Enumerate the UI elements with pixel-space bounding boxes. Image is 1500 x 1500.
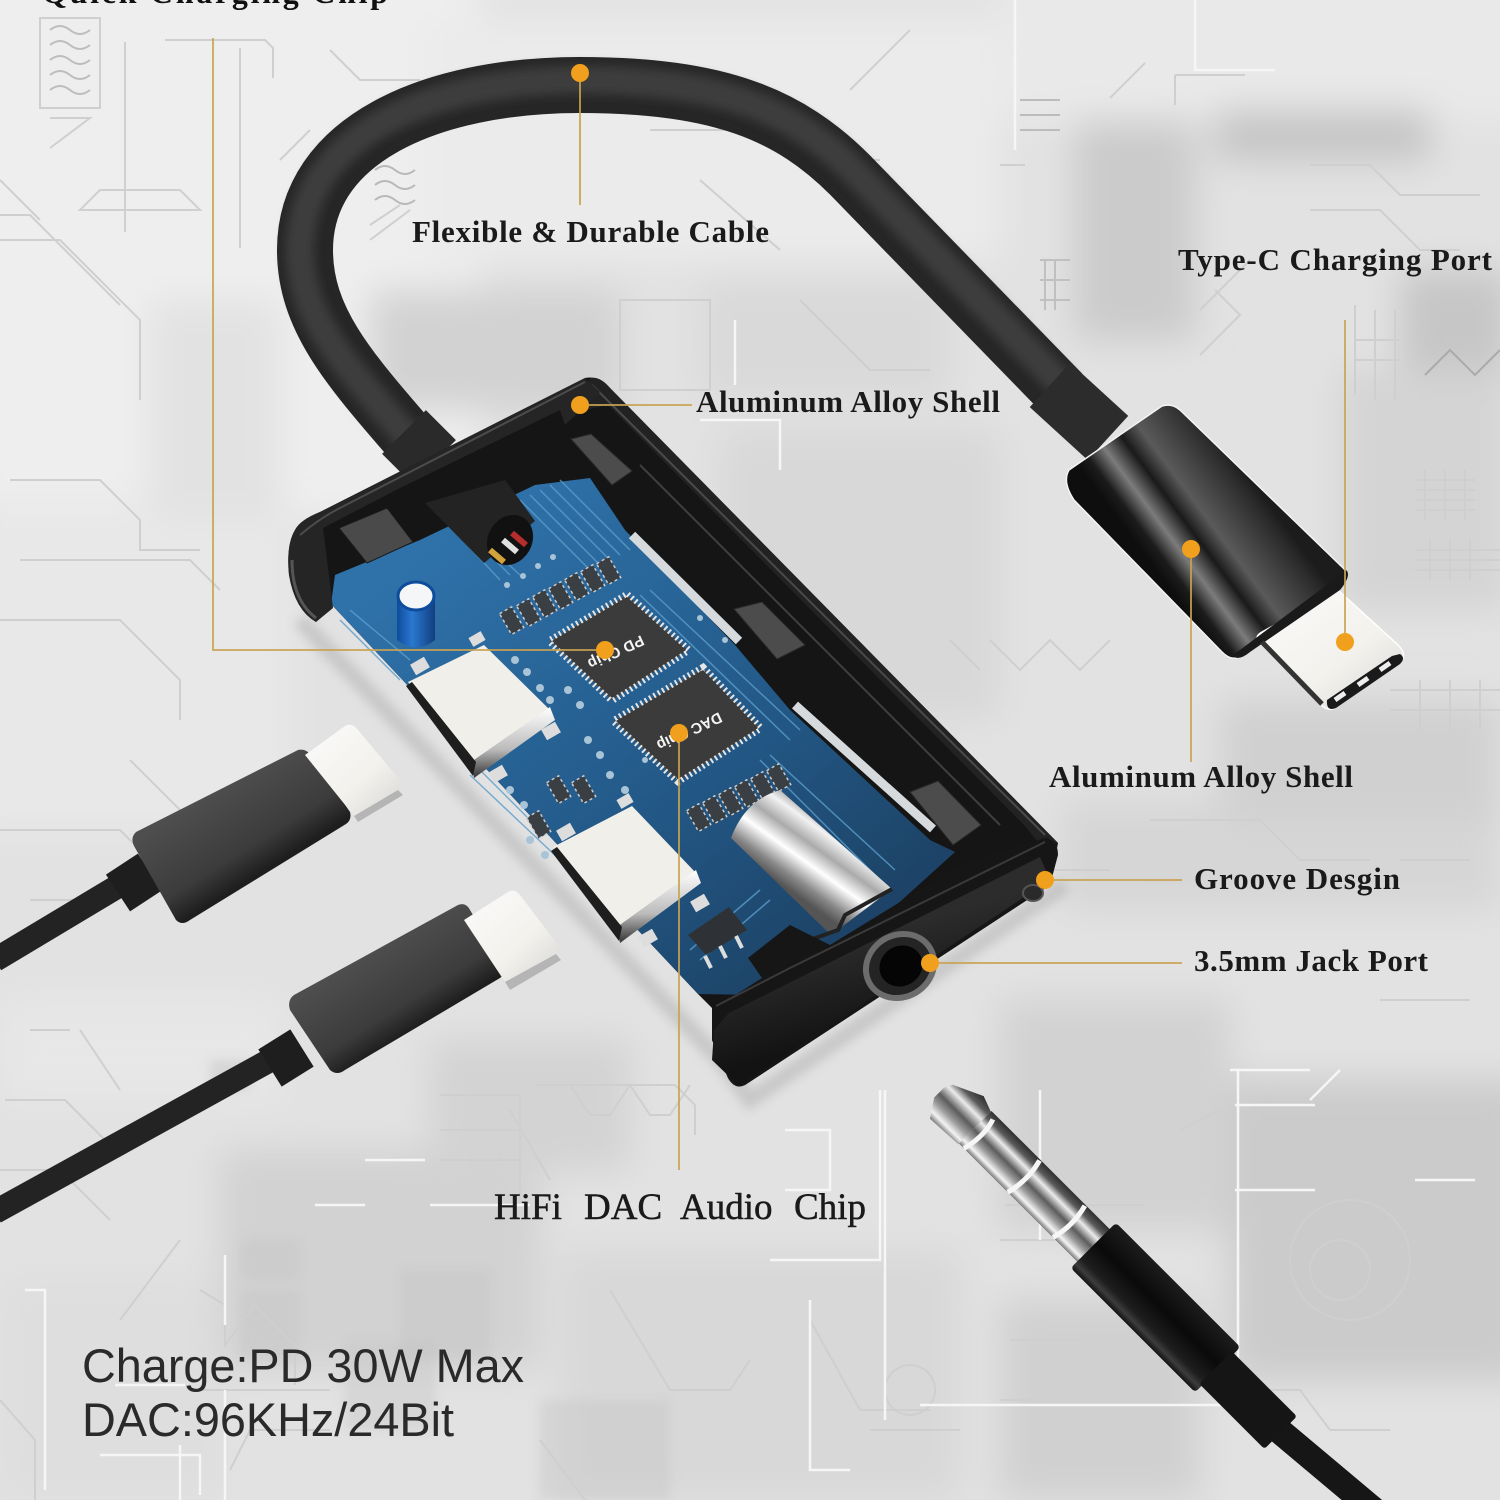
lower left USB-C cable plug — [0, 891, 561, 1212]
device shadow — [300, 620, 1065, 1100]
rail gray clips — [571, 434, 981, 845]
black sleeve — [1071, 1223, 1240, 1392]
USB-C port 2 on PCB — [551, 793, 710, 947]
cable strain relief — [404, 432, 434, 462]
main cable — [300, 80, 1108, 445]
cable socket with wires — [425, 480, 542, 574]
DAC chip: DAC Chip — [654, 708, 724, 753]
DAC chip — [614, 668, 760, 781]
body base — [288, 377, 1058, 1086]
right Type-C plug — [1066, 405, 1404, 709]
label: HiFi DAC Audio Chip: DAC — [584, 1187, 662, 1228]
label: HiFi DAC Audio Chip: Audio — [680, 1187, 772, 1228]
top end cap — [288, 378, 600, 622]
PCB rail white strips — [632, 535, 933, 829]
3.5mm audio plug — [917, 1069, 1405, 1500]
upper left USB-C cable plug — [0, 725, 403, 960]
3.5mm jack barrel — [731, 790, 892, 940]
groove hole — [1023, 885, 1043, 901]
bottom end cap — [712, 838, 1058, 1086]
USB-C port 1 on PCB — [406, 631, 561, 783]
label: Groove Desgin: Groove Desgin — [1194, 861, 1400, 896]
rail frame long side — [560, 378, 1058, 845]
black cable tail — [1267, 1418, 1399, 1500]
metal tongue — [1257, 590, 1404, 709]
label: HiFi DAC Audio Chip: HiFi — [494, 1187, 562, 1228]
metal tip and rings — [921, 1072, 995, 1146]
PD chip: PD Chip — [585, 631, 646, 672]
label: Aluminum Alloy Shell top: Aluminum Alloy Shell — [696, 384, 1000, 419]
SMD component rows — [500, 557, 791, 839]
spec text: Charge:PD 30W Max — [82, 1339, 524, 1392]
PD chip — [550, 595, 688, 700]
callout lines — [213, 38, 1345, 1170]
audio jack hole — [850, 918, 950, 1014]
adapter device — [288, 377, 1058, 1086]
PCB board — [331, 478, 955, 995]
label: Aluminum Alloy Shell lower: Aluminum Alloy Shell — [1049, 759, 1353, 794]
solder pads — [504, 554, 728, 859]
label: HiFi DAC Audio Chip: Chip — [794, 1187, 866, 1228]
label: Type-C Charging Port: Type-C Charging Port — [1178, 242, 1493, 277]
spec text: DAC:96KHz/24Bit — [82, 1393, 454, 1446]
capacitor — [397, 582, 435, 648]
callout dots — [571, 64, 1354, 972]
label: Flexible & Durable Cable: Flexible & Durable Cable — [412, 214, 769, 249]
label: 3.5mm Jack Port: 3.5mm Jack Port — [1194, 943, 1429, 978]
IC chip small — [688, 907, 747, 968]
PCB traces — [340, 480, 895, 960]
spec text — [82, 1339, 524, 1446]
